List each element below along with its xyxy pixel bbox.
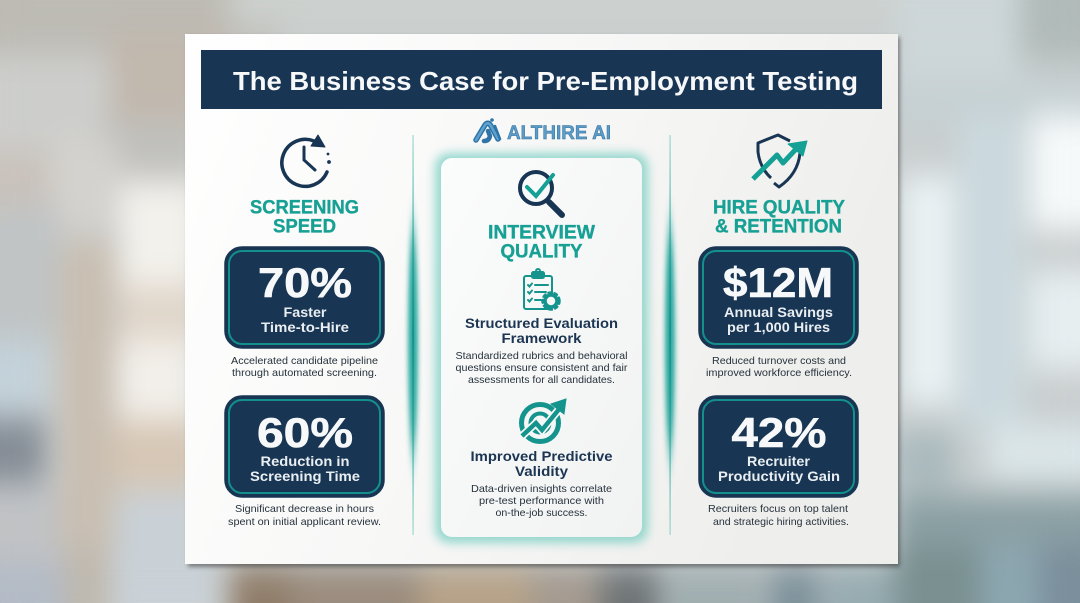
title: The Business Case for Pre-Employment Testing — [233, 66, 858, 96]
description: and strategic hiring activities. — [713, 516, 849, 528]
stat card: $12M: per 1,000 Hires — [727, 319, 830, 335]
heading: INTERVIEW — [488, 222, 595, 244]
block: structured evaluation: questions ensure consistent and fair — [456, 362, 628, 374]
description: spent on initial applicant review. — [228, 516, 381, 528]
title banner — [201, 50, 882, 109]
stat card: 60% — [225, 396, 384, 497]
heading: SCREENING — [250, 198, 359, 218]
block: structured evaluation: Structured Evaluation — [465, 315, 618, 331]
panel glow — [435, 153, 648, 543]
description — [231, 355, 378, 379]
stat card: 42% — [699, 396, 858, 497]
stat card: 70%: Faster — [284, 304, 327, 320]
stat card: 42%: Recruiter — [747, 453, 811, 469]
block: improved predictive validity: Improved Predictive — [470, 448, 613, 464]
block: improved predictive validity: Validity — [515, 463, 568, 479]
panel body — [441, 158, 642, 537]
stat card: 60%: 60% — [257, 409, 353, 456]
heading — [488, 222, 595, 262]
description — [708, 503, 849, 528]
block: structured evaluation — [456, 315, 628, 386]
icon: magnifier with check — [520, 172, 562, 215]
block: improved predictive validity: on-the-job success. — [496, 507, 588, 519]
description: improved workforce efficiency. — [706, 367, 852, 379]
icon: target with rising arrow — [522, 399, 566, 442]
block: structured evaluation: Standardized rubrics and behavioral — [456, 350, 628, 362]
left divider — [408, 135, 418, 535]
heading: HIRE QUALITY — [713, 198, 845, 218]
stat card: 42%: Productivity Gain — [718, 468, 840, 484]
stat card: $12M — [699, 247, 858, 348]
stat card: 70% — [225, 247, 384, 348]
heading — [250, 198, 359, 238]
icon: shield with rising arrow — [753, 135, 807, 187]
description — [228, 503, 381, 528]
stat card: $12M: $12M — [723, 259, 833, 306]
block: improved predictive validity: Data-driven insights correlate — [471, 483, 612, 495]
heading: QUALITY — [500, 242, 583, 262]
description: Accelerated candidate pipeline — [231, 355, 378, 367]
white card — [185, 34, 898, 564]
stat card: 60%: Screening Time — [250, 468, 360, 484]
right divider — [665, 135, 675, 535]
heading: & RETENTION — [715, 216, 842, 238]
block: improved predictive validity: pre-test performance with — [479, 495, 604, 507]
heading — [713, 198, 845, 238]
stat card: 70%: 70% — [258, 259, 352, 306]
description: Significant decrease in hours — [235, 503, 374, 515]
stat card: 42%: 42% — [732, 409, 826, 456]
icon: clipboard with gear — [524, 269, 560, 310]
icon: clock with arrow — [282, 135, 331, 186]
description — [706, 355, 852, 379]
description: through automated screening. — [232, 367, 377, 379]
panel: screening speed — [225, 135, 384, 528]
stat card: 60%: Reduction in — [260, 453, 350, 469]
card shadow — [188, 37, 900, 567]
block: improved predictive validity — [470, 448, 613, 519]
description: Reduced turnover costs and — [712, 355, 846, 367]
heading: SPEED — [273, 216, 336, 238]
logo mark — [476, 119, 500, 141]
panel: hire quality and retention — [699, 135, 858, 528]
panel: interview quality — [435, 153, 648, 543]
block: structured evaluation: assessments for all candidates. — [468, 374, 615, 386]
logo: Althire AI — [476, 119, 611, 144]
block: structured evaluation: Framework — [502, 330, 582, 346]
stat card: 70%: Time-to-Hire — [261, 319, 349, 335]
stat card: $12M: Annual Savings — [724, 304, 833, 320]
logo wordmark: ALTHIRE AI — [507, 122, 611, 144]
description: Recruiters focus on top talent — [708, 503, 848, 515]
